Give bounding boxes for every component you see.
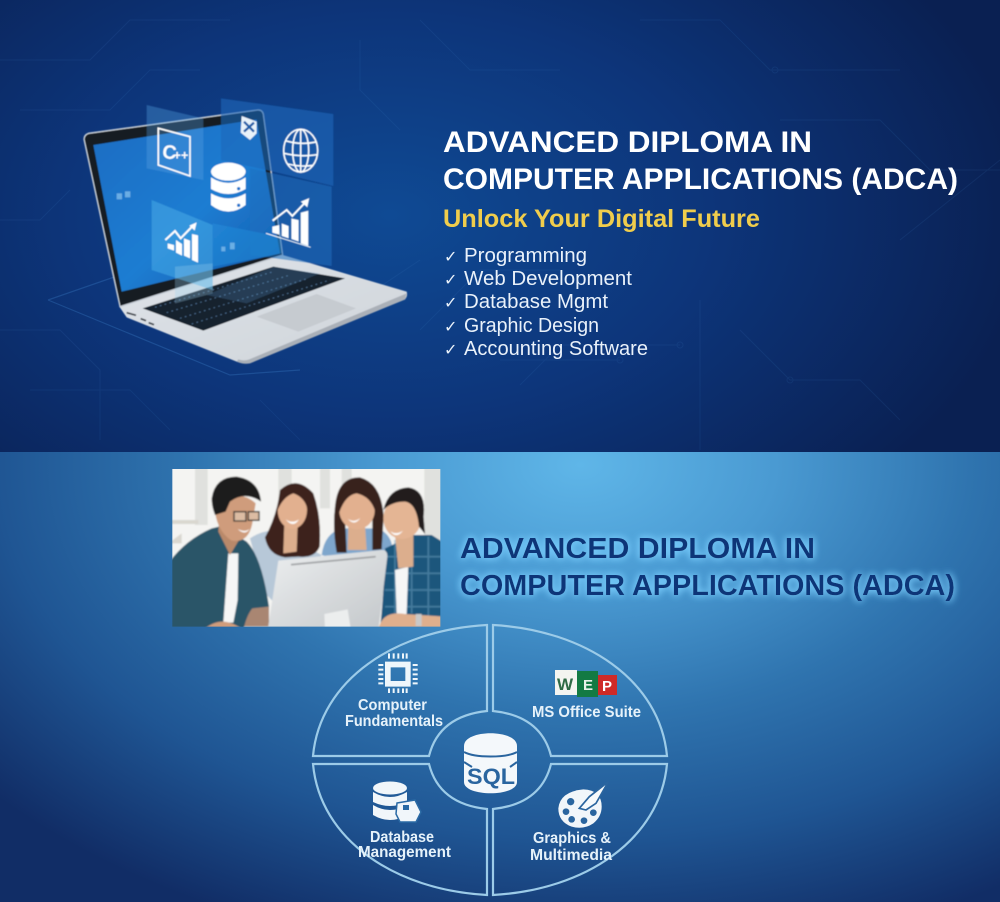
platform outline under laptop bbox=[48, 275, 300, 375]
checklist of topics bbox=[444, 244, 648, 360]
icon: bar chart left bbox=[165, 222, 198, 263]
keyboard bbox=[143, 267, 345, 331]
title: top heading bbox=[443, 126, 958, 196]
icon: globe bbox=[284, 129, 318, 172]
icon: office apps bbox=[555, 670, 617, 697]
icon: database with lock bbox=[373, 782, 421, 822]
label: Computer Fundamentals: Computer bbox=[358, 697, 427, 714]
label: Database Management bbox=[358, 829, 451, 861]
label: Graphics & Multimedia: Multimedia bbox=[530, 847, 612, 864]
icon: central SQL database bbox=[464, 733, 517, 793]
computer monitor bbox=[268, 550, 387, 630]
icon: database bbox=[211, 163, 246, 212]
icon: central SQL database: SQL bbox=[467, 764, 515, 789]
list item: Programming: ✓ bbox=[444, 247, 457, 266]
list item: Database Mgmt: ✓ bbox=[444, 293, 457, 312]
person: woman on right in plaid bbox=[378, 487, 445, 630]
segment: database management bbox=[313, 764, 487, 895]
title: lower heading with glow bbox=[460, 533, 955, 602]
icon: office apps: P bbox=[602, 678, 612, 695]
list item: Graphic Design: ✓ bbox=[444, 317, 457, 336]
ports bbox=[127, 313, 154, 325]
icon: C++ code window bbox=[158, 128, 190, 176]
list item: Web Development: Web Development bbox=[464, 267, 632, 290]
segment: graphics and multimedia bbox=[493, 764, 667, 895]
list item: Web Development: ✓ bbox=[444, 270, 457, 289]
keyboard reflection bbox=[207, 267, 320, 303]
icon: office apps: W bbox=[557, 675, 574, 694]
label: MS Office Suite: MS Office Suite bbox=[532, 704, 641, 721]
illustration: laptop with floating icons bbox=[84, 98, 407, 364]
label: Database Management: Management bbox=[358, 844, 451, 861]
label: Computer Fundamentals bbox=[345, 697, 443, 730]
list item: Accounting Software: Accounting Software bbox=[464, 337, 648, 360]
title: lower heading with glow: COMPUTER APPLICATIONS (ADCA) bbox=[460, 570, 955, 602]
laptop base bbox=[119, 255, 407, 363]
panel: center hologram bbox=[152, 200, 213, 290]
photo: students at a computer bbox=[168, 465, 445, 632]
icon: processor chip bbox=[378, 653, 418, 693]
panel: lower section background bbox=[0, 452, 1000, 902]
circuit pattern background bbox=[0, 20, 1000, 450]
list item: Accounting Software: ✓ bbox=[444, 340, 457, 359]
segment: MS Office suite bbox=[493, 625, 667, 756]
laptop front edge bbox=[237, 293, 407, 364]
panel: top banner background bbox=[0, 0, 1000, 452]
panel: right upper hologram bbox=[221, 98, 333, 186]
icon: office apps: E bbox=[583, 677, 593, 694]
segment: computer fundamentals bbox=[313, 625, 487, 756]
diagram: ADCA modules wheel bbox=[313, 625, 667, 895]
subtitle: Unlock Your Digital Future bbox=[443, 205, 760, 233]
trackpad bbox=[257, 294, 356, 332]
icon: C++ code window: C bbox=[161, 142, 178, 165]
person: man with glasses bbox=[168, 477, 269, 630]
icon: C++ code window: ++ bbox=[173, 148, 188, 162]
title: top heading: ADVANCED DIPLOMA IN bbox=[443, 126, 812, 159]
panel: lower glass reflection bbox=[175, 263, 213, 303]
panel: right lower hologram bbox=[250, 168, 332, 266]
label: Computer Fundamentals: Fundamentals bbox=[345, 713, 443, 730]
title: top heading: COMPUTER APPLICATIONS (ADCA) bbox=[443, 163, 958, 196]
label: Database Management: Database bbox=[370, 829, 434, 846]
icon: paint palette bbox=[558, 782, 608, 828]
list item: Database Mgmt: Database Mgmt bbox=[464, 290, 608, 313]
list item: Programming: Programming bbox=[464, 244, 587, 267]
list item: Graphic Design: Graphic Design bbox=[464, 314, 599, 337]
laptop screen frame bbox=[84, 110, 283, 307]
label: Graphics & Multimedia bbox=[530, 830, 612, 864]
title: lower heading with glow: ADVANCED DIPLOMA IN bbox=[460, 533, 815, 565]
icon: bar chart right bbox=[266, 198, 311, 247]
person: woman second from left bbox=[250, 483, 322, 607]
photo backdrop bbox=[168, 465, 445, 632]
panel: left upper hologram bbox=[147, 105, 203, 180]
person: woman third from left bbox=[322, 477, 392, 556]
small screen glyphs bbox=[117, 191, 235, 251]
icon: tool tile bbox=[241, 116, 257, 140]
laptop screen bbox=[93, 119, 280, 292]
label: Graphics & Multimedia: Graphics & bbox=[533, 830, 611, 847]
